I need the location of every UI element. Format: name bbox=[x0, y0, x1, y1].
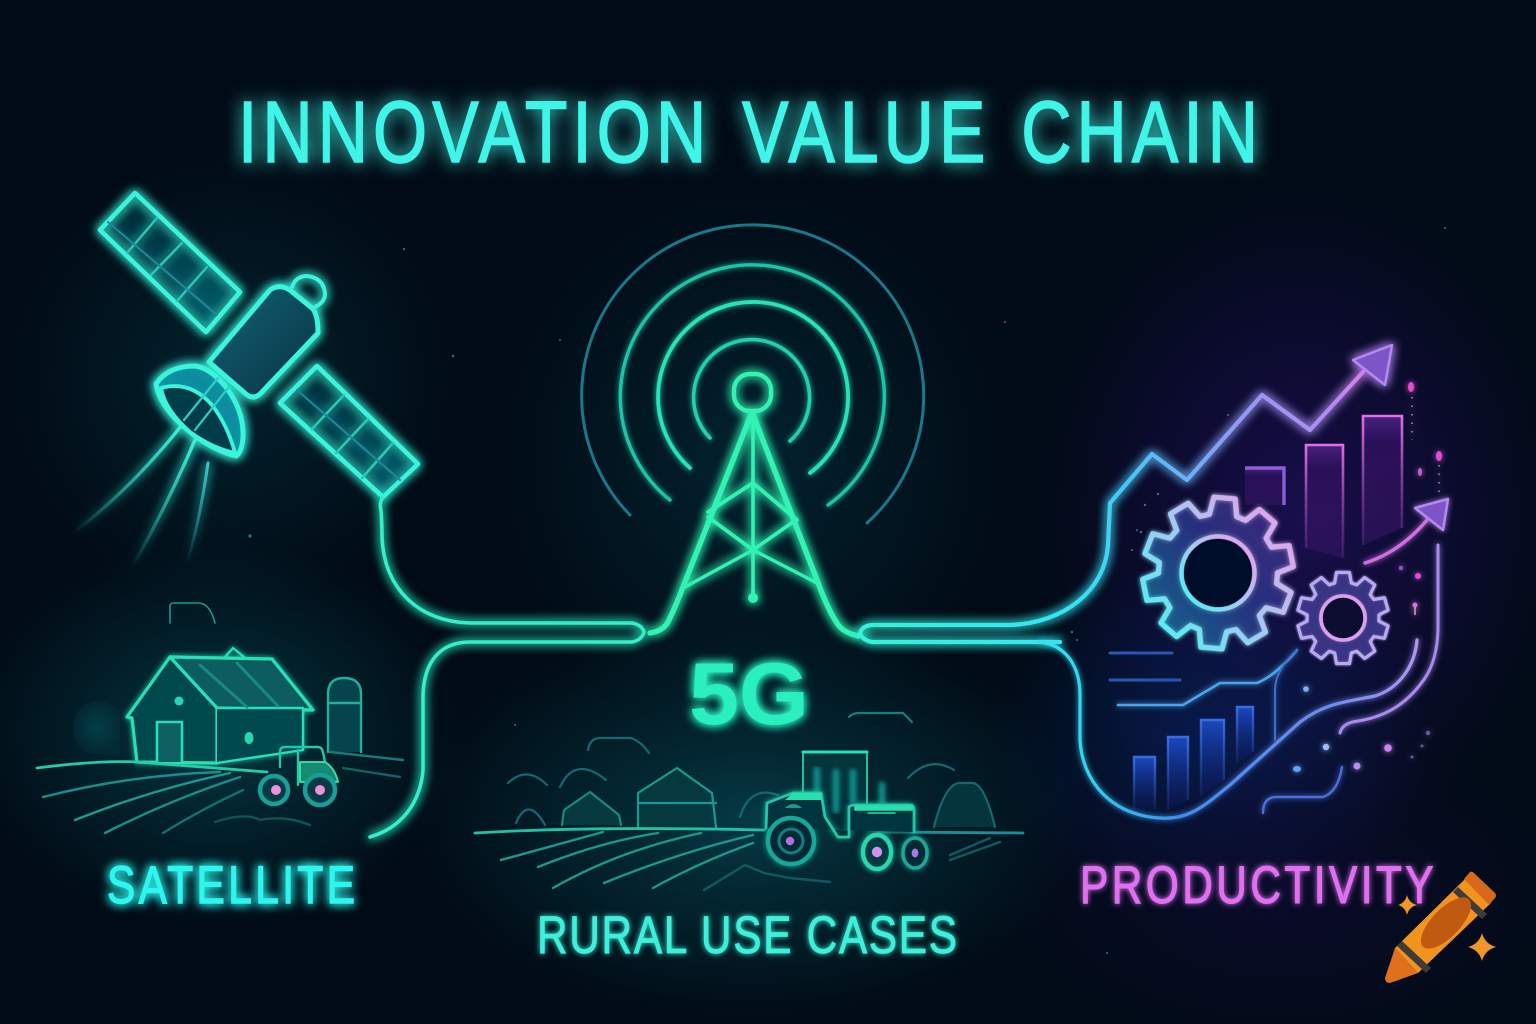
satellite signal beams bbox=[73, 425, 208, 567]
wire: lower productivity outline bbox=[1040, 545, 1438, 818]
icon: signal waves bbox=[582, 225, 924, 523]
icon: 5G tower bbox=[650, 374, 858, 636]
satellite body bbox=[209, 287, 318, 397]
barn bbox=[127, 648, 313, 763]
satellite upper solar panel bbox=[100, 193, 240, 332]
icon: crayon watermark bbox=[1385, 872, 1496, 983]
trend arrow head bbox=[1353, 345, 1392, 385]
icon: farm scene bbox=[37, 603, 403, 833]
satellite lower solar panel bbox=[280, 366, 418, 497]
satellite top cap bbox=[292, 276, 325, 307]
icon: large gear bbox=[1137, 492, 1299, 654]
satellite dish bbox=[156, 366, 243, 456]
icon: rural use cases scene bbox=[475, 713, 1023, 890]
ground and furrows bbox=[475, 829, 1023, 890]
label: productivity: PRODUCTIVITY bbox=[1080, 857, 1434, 915]
title: INNOVATION VALUE CHAIN bbox=[238, 84, 1258, 181]
icon: satellite bbox=[73, 193, 418, 567]
silo bbox=[328, 678, 361, 752]
background stars bbox=[248, 227, 1446, 954]
tractor bbox=[260, 747, 338, 805]
wire: 5G tower to productivity bbox=[860, 345, 1392, 642]
text lines in productivity area bbox=[1110, 653, 1180, 680]
background buildings and hills bbox=[508, 713, 995, 827]
small growth arrow bbox=[1365, 499, 1448, 563]
sparkles bbox=[1398, 895, 1417, 915]
label: satellite: SATELLITE bbox=[107, 857, 355, 915]
tall building bbox=[803, 752, 882, 810]
icon: small gear bbox=[1298, 572, 1388, 664]
distant outline bbox=[170, 603, 215, 623]
chart: blue bars bbox=[1134, 707, 1253, 810]
ground and furrows bbox=[37, 752, 403, 833]
wire: satellite to 5G tower bbox=[370, 497, 644, 837]
tractor bbox=[766, 793, 927, 869]
chart: purple bars bbox=[1245, 416, 1402, 558]
label: 5G: 5G bbox=[689, 644, 809, 743]
tree bbox=[73, 701, 120, 754]
label: rural use cases: RURAL USE CASES bbox=[537, 907, 957, 965]
particles bbox=[1293, 382, 1442, 772]
